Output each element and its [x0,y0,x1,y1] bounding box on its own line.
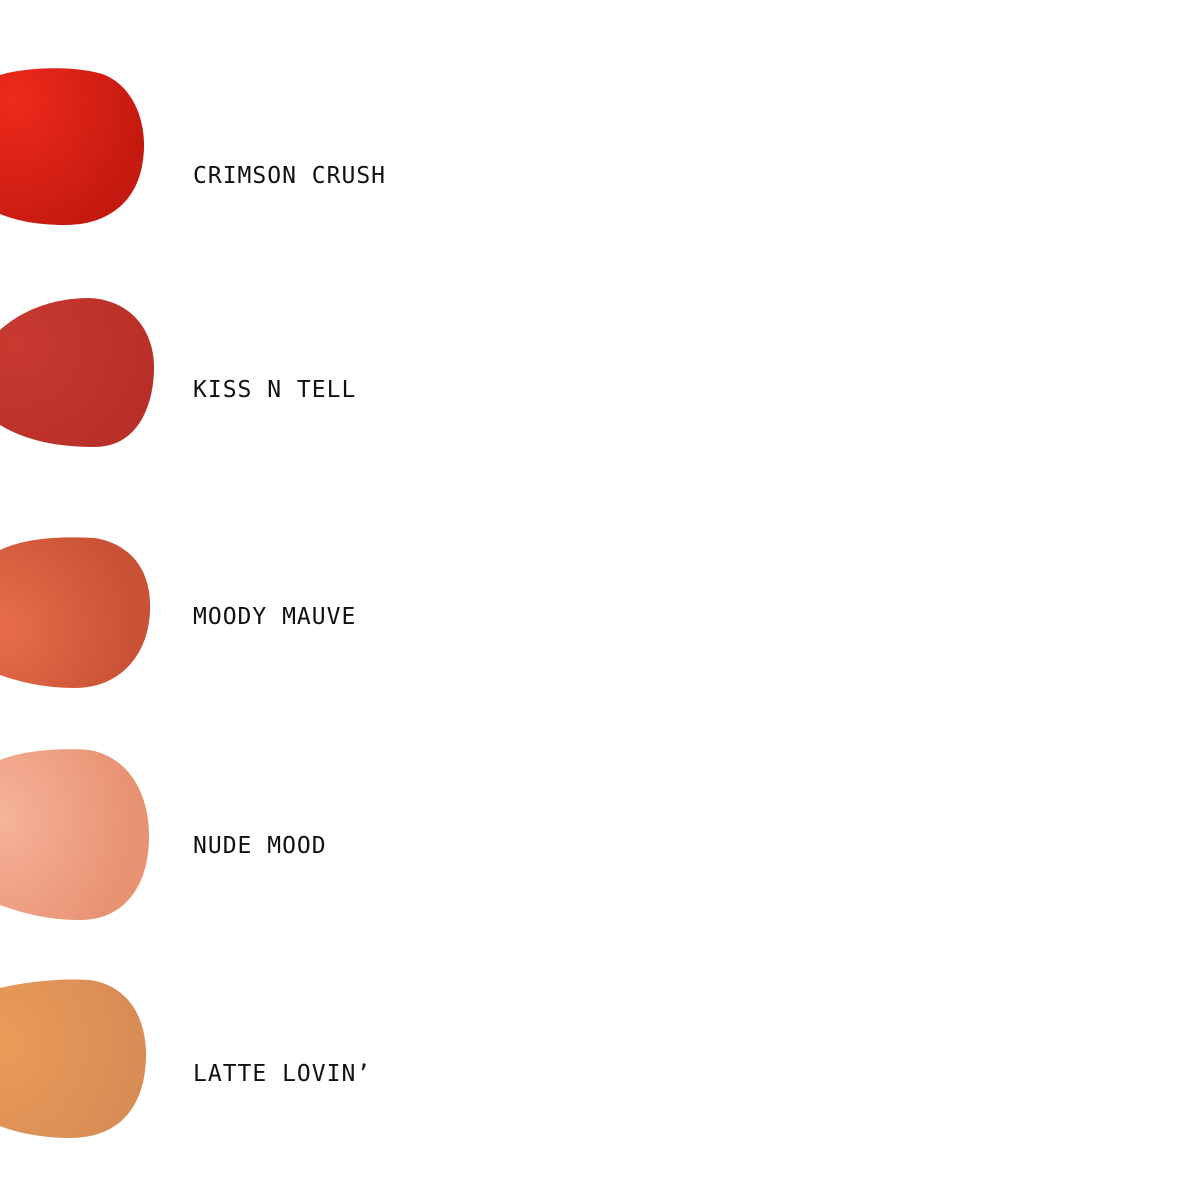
swatches [0,68,154,1138]
swatch: crimson crush [0,68,144,225]
label: kiss n tell: KISS N TELL [193,377,356,403]
swatch: moody mauve [0,537,150,688]
label: latte lovin: LATTE LOVIN’ [193,1061,371,1087]
label: crimson crush: CRIMSON CRUSH [193,163,386,189]
label: nude mood: NUDE MOOD [193,833,327,859]
swatch: nude mood [0,749,149,920]
swatch: kiss n tell [0,298,154,447]
label: moody mauve: MOODY MAUVE [193,604,356,630]
swatch: latte lovin [0,979,146,1138]
